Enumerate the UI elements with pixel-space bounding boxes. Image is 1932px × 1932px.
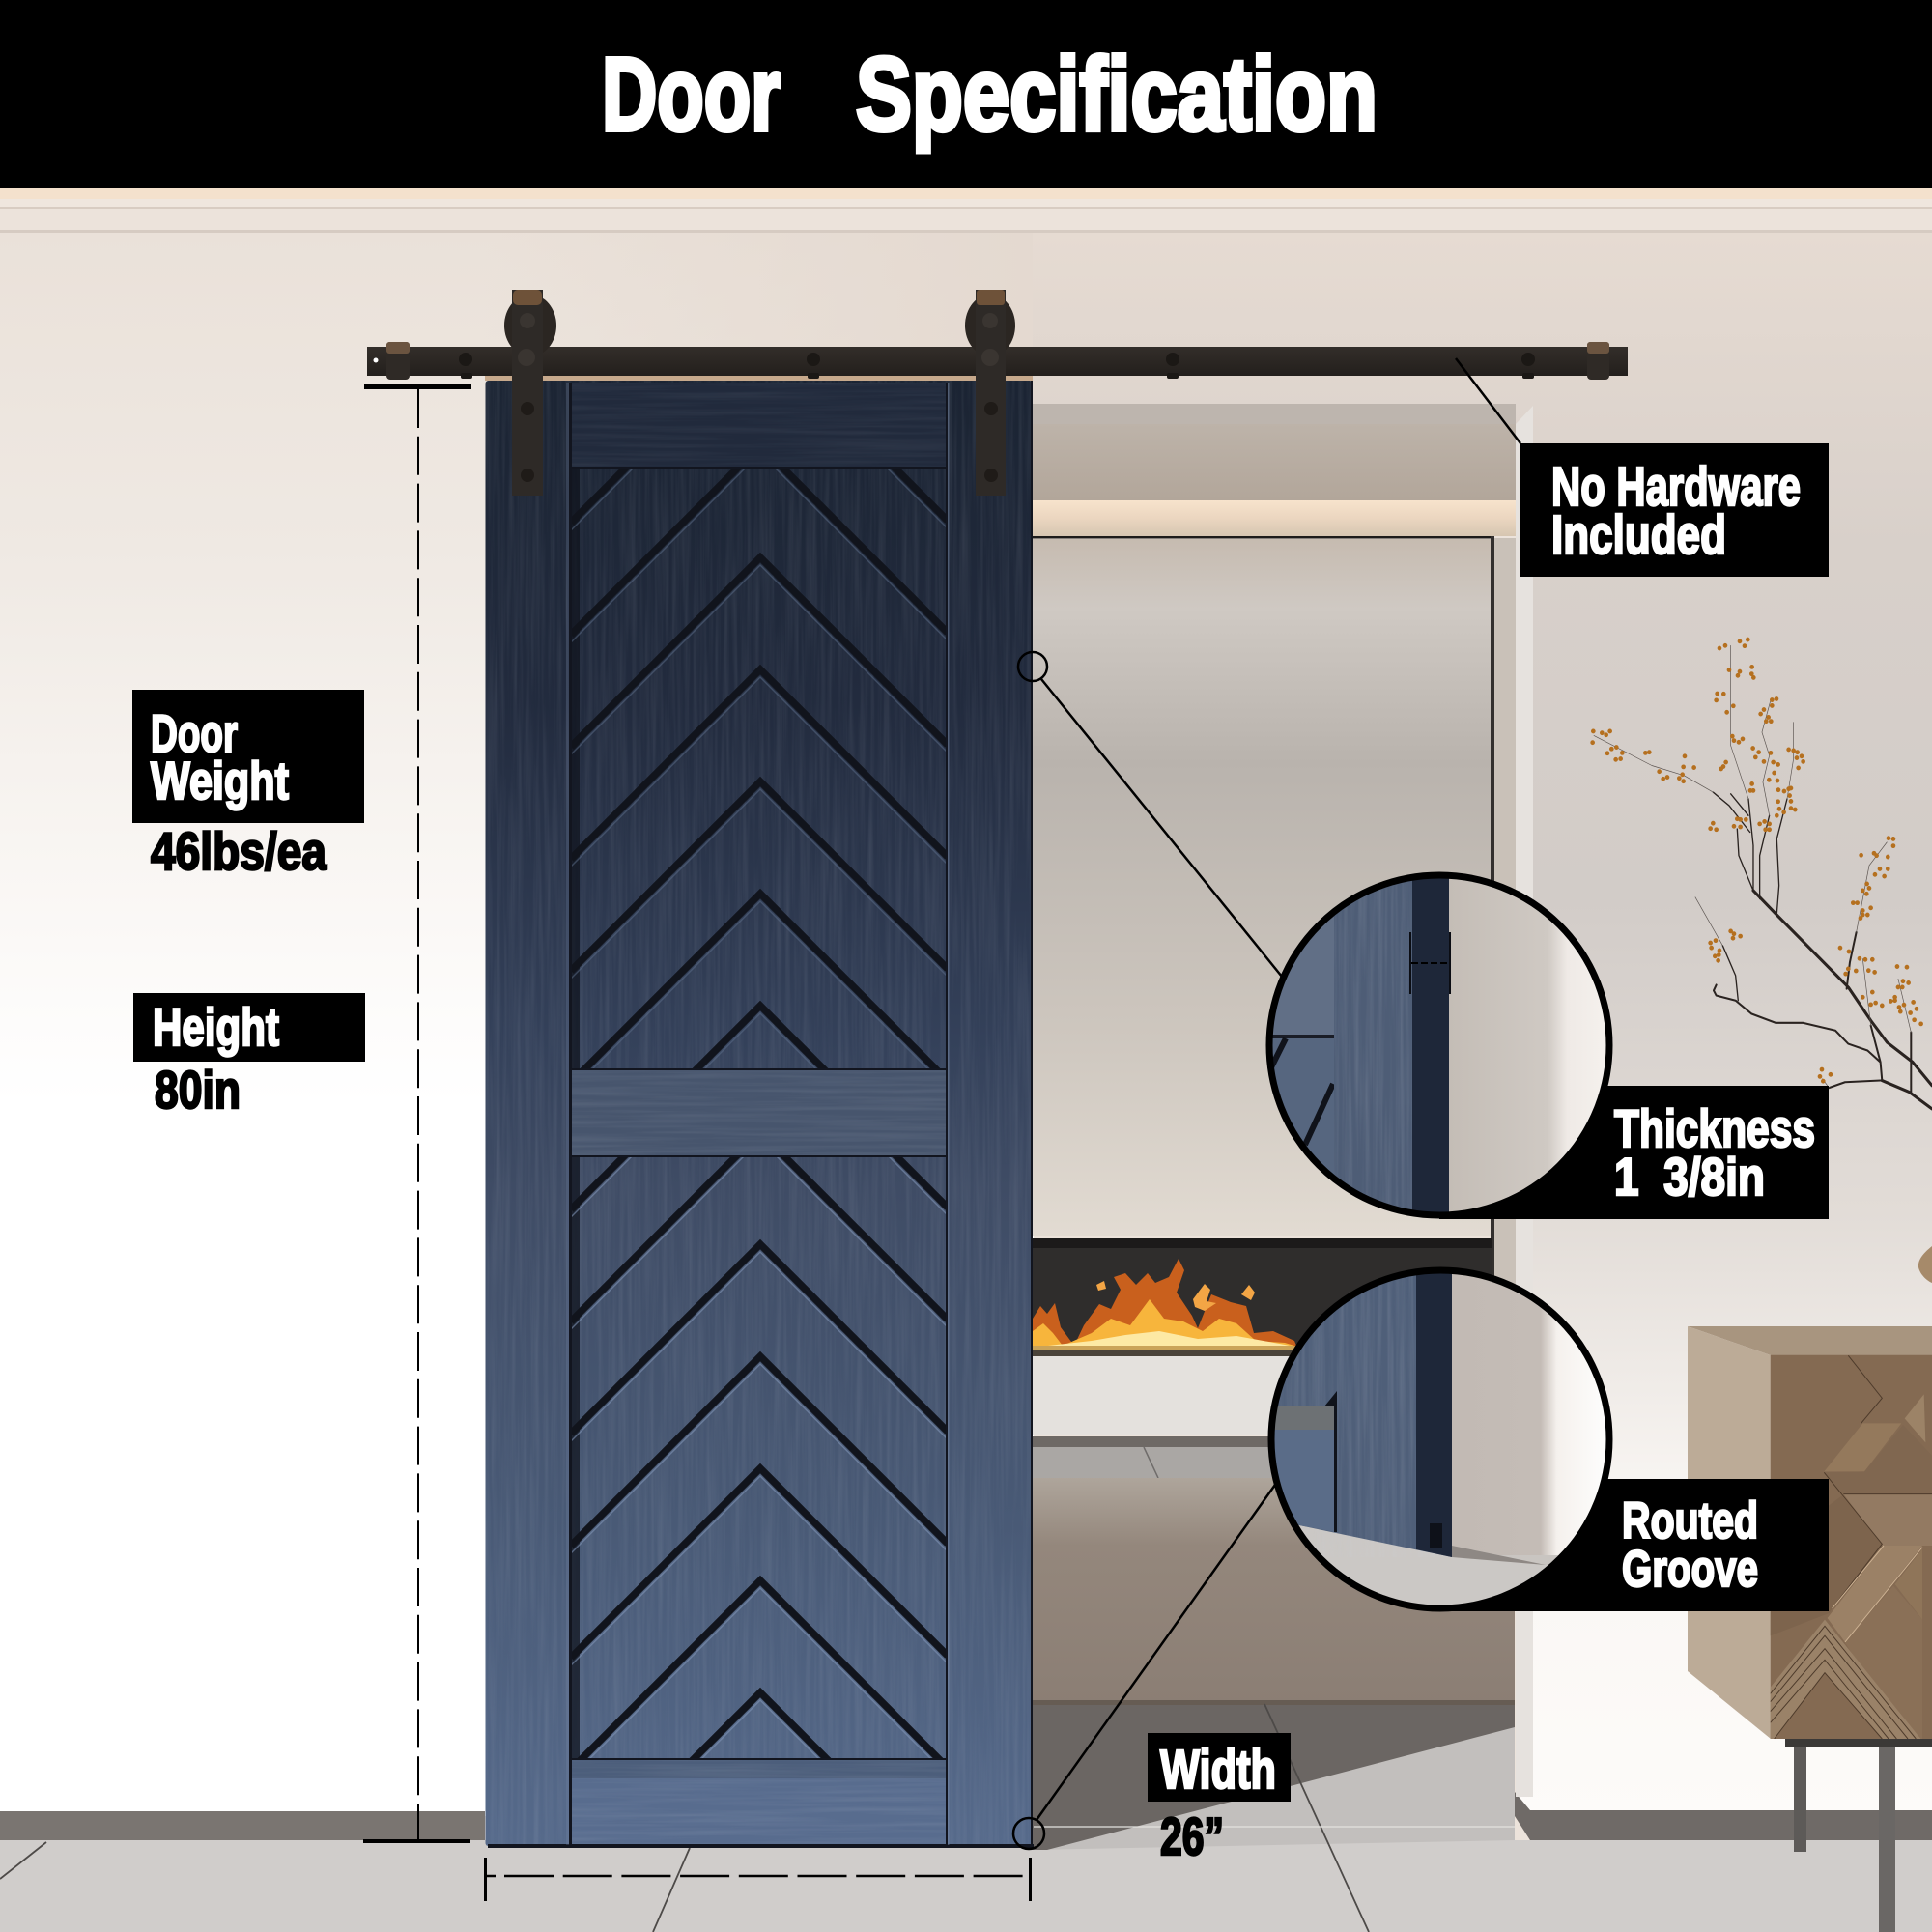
weight value: 46lbs/ea bbox=[151, 821, 327, 881]
label: thickness: Thickness bbox=[1614, 1098, 1815, 1158]
vase edge bbox=[1918, 1246, 1932, 1283]
height value: 80in bbox=[155, 1060, 241, 1120]
label: routed groove bbox=[1439, 1479, 1829, 1611]
right roller hanger bbox=[965, 290, 1015, 496]
sliding hardware track bbox=[367, 342, 1628, 380]
label: thickness bbox=[1439, 1086, 1829, 1219]
rug bbox=[1033, 1478, 1515, 1704]
track stop right bbox=[1587, 342, 1609, 380]
title: Specification bbox=[856, 35, 1378, 153]
track shadow bbox=[485, 375, 1033, 381]
detail circle: routed groove bbox=[1256, 1265, 1623, 1623]
label: routed groove: Routed bbox=[1622, 1492, 1758, 1549]
floor tile lines bbox=[0, 1704, 1515, 1932]
width value: 26” bbox=[1160, 1806, 1224, 1866]
bottom rail bbox=[572, 1759, 947, 1845]
label: routed groove: Groove bbox=[1622, 1541, 1758, 1598]
title bar bbox=[0, 0, 1932, 188]
middle rail bbox=[572, 1070, 947, 1156]
title: Door bbox=[602, 35, 781, 153]
label: height bbox=[133, 993, 365, 1062]
leader lines bbox=[1013, 358, 1520, 1849]
detail circle: thickness bbox=[1261, 869, 1618, 1222]
width dimension line bbox=[484, 1858, 1032, 1901]
label: no hardware bbox=[1520, 443, 1829, 577]
decorative branch with berries bbox=[1593, 639, 1932, 1109]
barn door bbox=[485, 333, 1034, 1889]
label: no hardware: Included bbox=[1551, 504, 1726, 566]
top rail bbox=[572, 383, 947, 468]
lower chevron grooves bbox=[572, 1157, 946, 1758]
track stop left bbox=[386, 342, 410, 380]
label: door weight: Door bbox=[151, 703, 238, 763]
floor in doorway bbox=[1033, 1705, 1515, 1850]
label: height: Height bbox=[153, 997, 279, 1057]
flames bbox=[1033, 1259, 1296, 1346]
label: door weight bbox=[132, 690, 364, 823]
upper chevron grooves bbox=[572, 469, 946, 1068]
left roller hanger bbox=[504, 290, 556, 496]
doorway interior bbox=[1033, 404, 1533, 1850]
label: width: Width bbox=[1160, 1739, 1276, 1801]
height dimension line bbox=[363, 384, 471, 1843]
fireplace bbox=[1033, 1238, 1492, 1356]
label: no hardware: No Hardware bbox=[1551, 456, 1801, 518]
cabinet bbox=[1688, 1246, 1932, 1932]
title bbox=[602, 35, 1378, 153]
label: thickness: 1 3/8in bbox=[1614, 1147, 1765, 1207]
label: door weight: Weight bbox=[151, 751, 289, 810]
